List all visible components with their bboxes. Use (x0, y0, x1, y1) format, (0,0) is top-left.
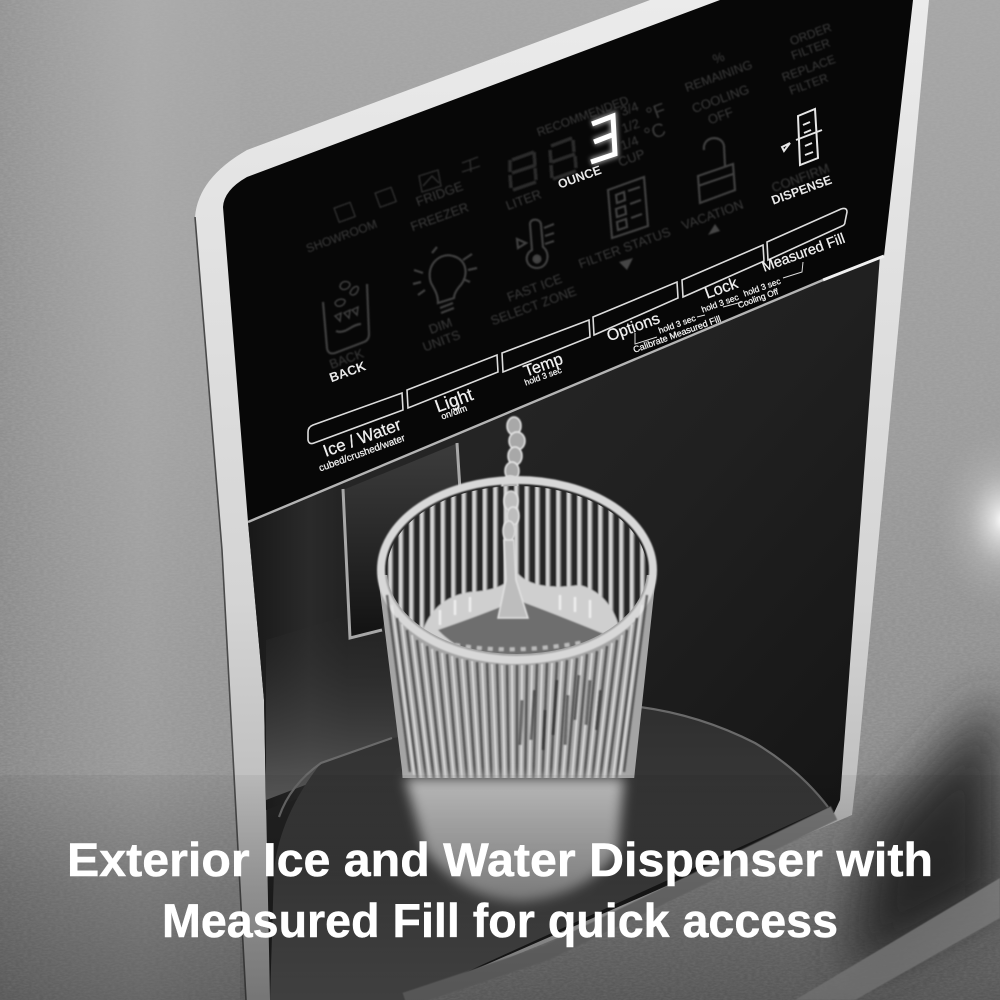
icon: padlock (698, 138, 735, 203)
dim icons and legends: FILTER (789, 36, 832, 63)
glass front ribs (387, 595, 647, 790)
dim icons and legends: SHOWROOM (304, 217, 379, 256)
cavity floor (270, 707, 828, 1000)
dim icons and legends: FRIDGE (414, 178, 465, 209)
icon: thermometer (517, 220, 554, 268)
button labels: Calibrate Measured Fill (632, 314, 722, 355)
dim icons and legends: VACATION (680, 197, 745, 233)
glass inner back ribs (387, 486, 647, 654)
dim icons and legends: BACK (327, 346, 366, 372)
button labels: Ice / Water (321, 415, 404, 461)
button labels: hold 3 sec (742, 276, 783, 299)
digit 3 lit (591, 116, 615, 162)
button labels: Lock (703, 275, 741, 303)
button labels: Light (432, 384, 476, 416)
dim icons and legends: LITER (504, 186, 543, 213)
dim icons and legends: REPLACE (780, 52, 837, 84)
ribbed glass (378, 480, 660, 800)
floor front lip (405, 813, 834, 1000)
caption: Exterior Ice and Water Dispenser with (67, 834, 933, 887)
dim icons and legends: FAST ICE (505, 271, 564, 305)
dim icons and legends: CUP (616, 146, 647, 170)
dim icons and legends: 1/2 (619, 116, 642, 136)
back plate behind glass (343, 443, 461, 638)
water stream (502, 417, 525, 496)
icon: light bulb (413, 247, 477, 313)
dispenser cavity (248, 255, 880, 1000)
dark refraction streaks (520, 675, 600, 750)
lit labels: OUNCE (556, 163, 603, 192)
icon: ice bin (323, 281, 369, 353)
dim icons and legends: 1/4 (618, 133, 641, 153)
button labels: Cooling Off (736, 286, 780, 310)
dim icons and legends: OFF (706, 104, 735, 127)
dim icons and legends: FILTER STATUS (576, 224, 673, 271)
button labels: on/dim (440, 403, 468, 421)
caption: Measured Fill for quick access (162, 895, 838, 948)
dim icons and legends: SELECT ZONE (489, 283, 579, 328)
dim icons and legends: °C (642, 119, 669, 146)
icon: seven-segment dim digits (510, 138, 576, 190)
dim icons and legends: COOLING (690, 81, 751, 116)
button labels (318, 231, 847, 474)
left side wall (248, 482, 350, 810)
dim icons and legends: ORDER (788, 20, 834, 48)
dim icons and legends: °F (643, 100, 669, 126)
button labels: hold 3 sec (657, 313, 698, 336)
button labels: hold 3 sec (700, 292, 741, 315)
bottom shade band (0, 775, 1000, 1000)
icon: filter status checklist (608, 177, 648, 238)
lit icon: dispense fill gauge (782, 109, 822, 165)
dim icons and legends: UNITS (421, 327, 463, 354)
glass outer body (378, 575, 656, 800)
dim icons and legends: CONFIRM (769, 160, 832, 195)
control panel: BACK (327, 358, 368, 385)
button labels: hold 3 sec (523, 365, 564, 388)
water surface (423, 573, 619, 643)
chrome frame around dispenser (195, 0, 929, 1000)
icon: showroom and door glyphs (334, 157, 480, 222)
blurred lower glass (405, 778, 624, 902)
touch button outlines (308, 208, 847, 444)
button labels: Options (605, 310, 662, 345)
dim icons and legends (304, 20, 837, 372)
button labels: Measured Fill (760, 231, 847, 276)
caption (67, 834, 933, 948)
dim icons and legends: DIM (427, 315, 454, 337)
stream in glass (498, 491, 528, 618)
dim icons and legends: 3/4 (618, 99, 641, 119)
dim icons and legends: FREEZER (408, 199, 471, 234)
glass rim (381, 480, 653, 660)
button labels: Temp (521, 350, 565, 381)
dim icons and legends: REMAINING (683, 58, 754, 95)
dim icons and legends: FILTER (787, 71, 830, 98)
dim icons and legends: % (710, 49, 727, 67)
dim icons and legends: RECOMMENDED (535, 93, 631, 139)
control panel: DISPENSE (770, 173, 834, 208)
button labels: cubed/crushed/water (318, 433, 407, 474)
